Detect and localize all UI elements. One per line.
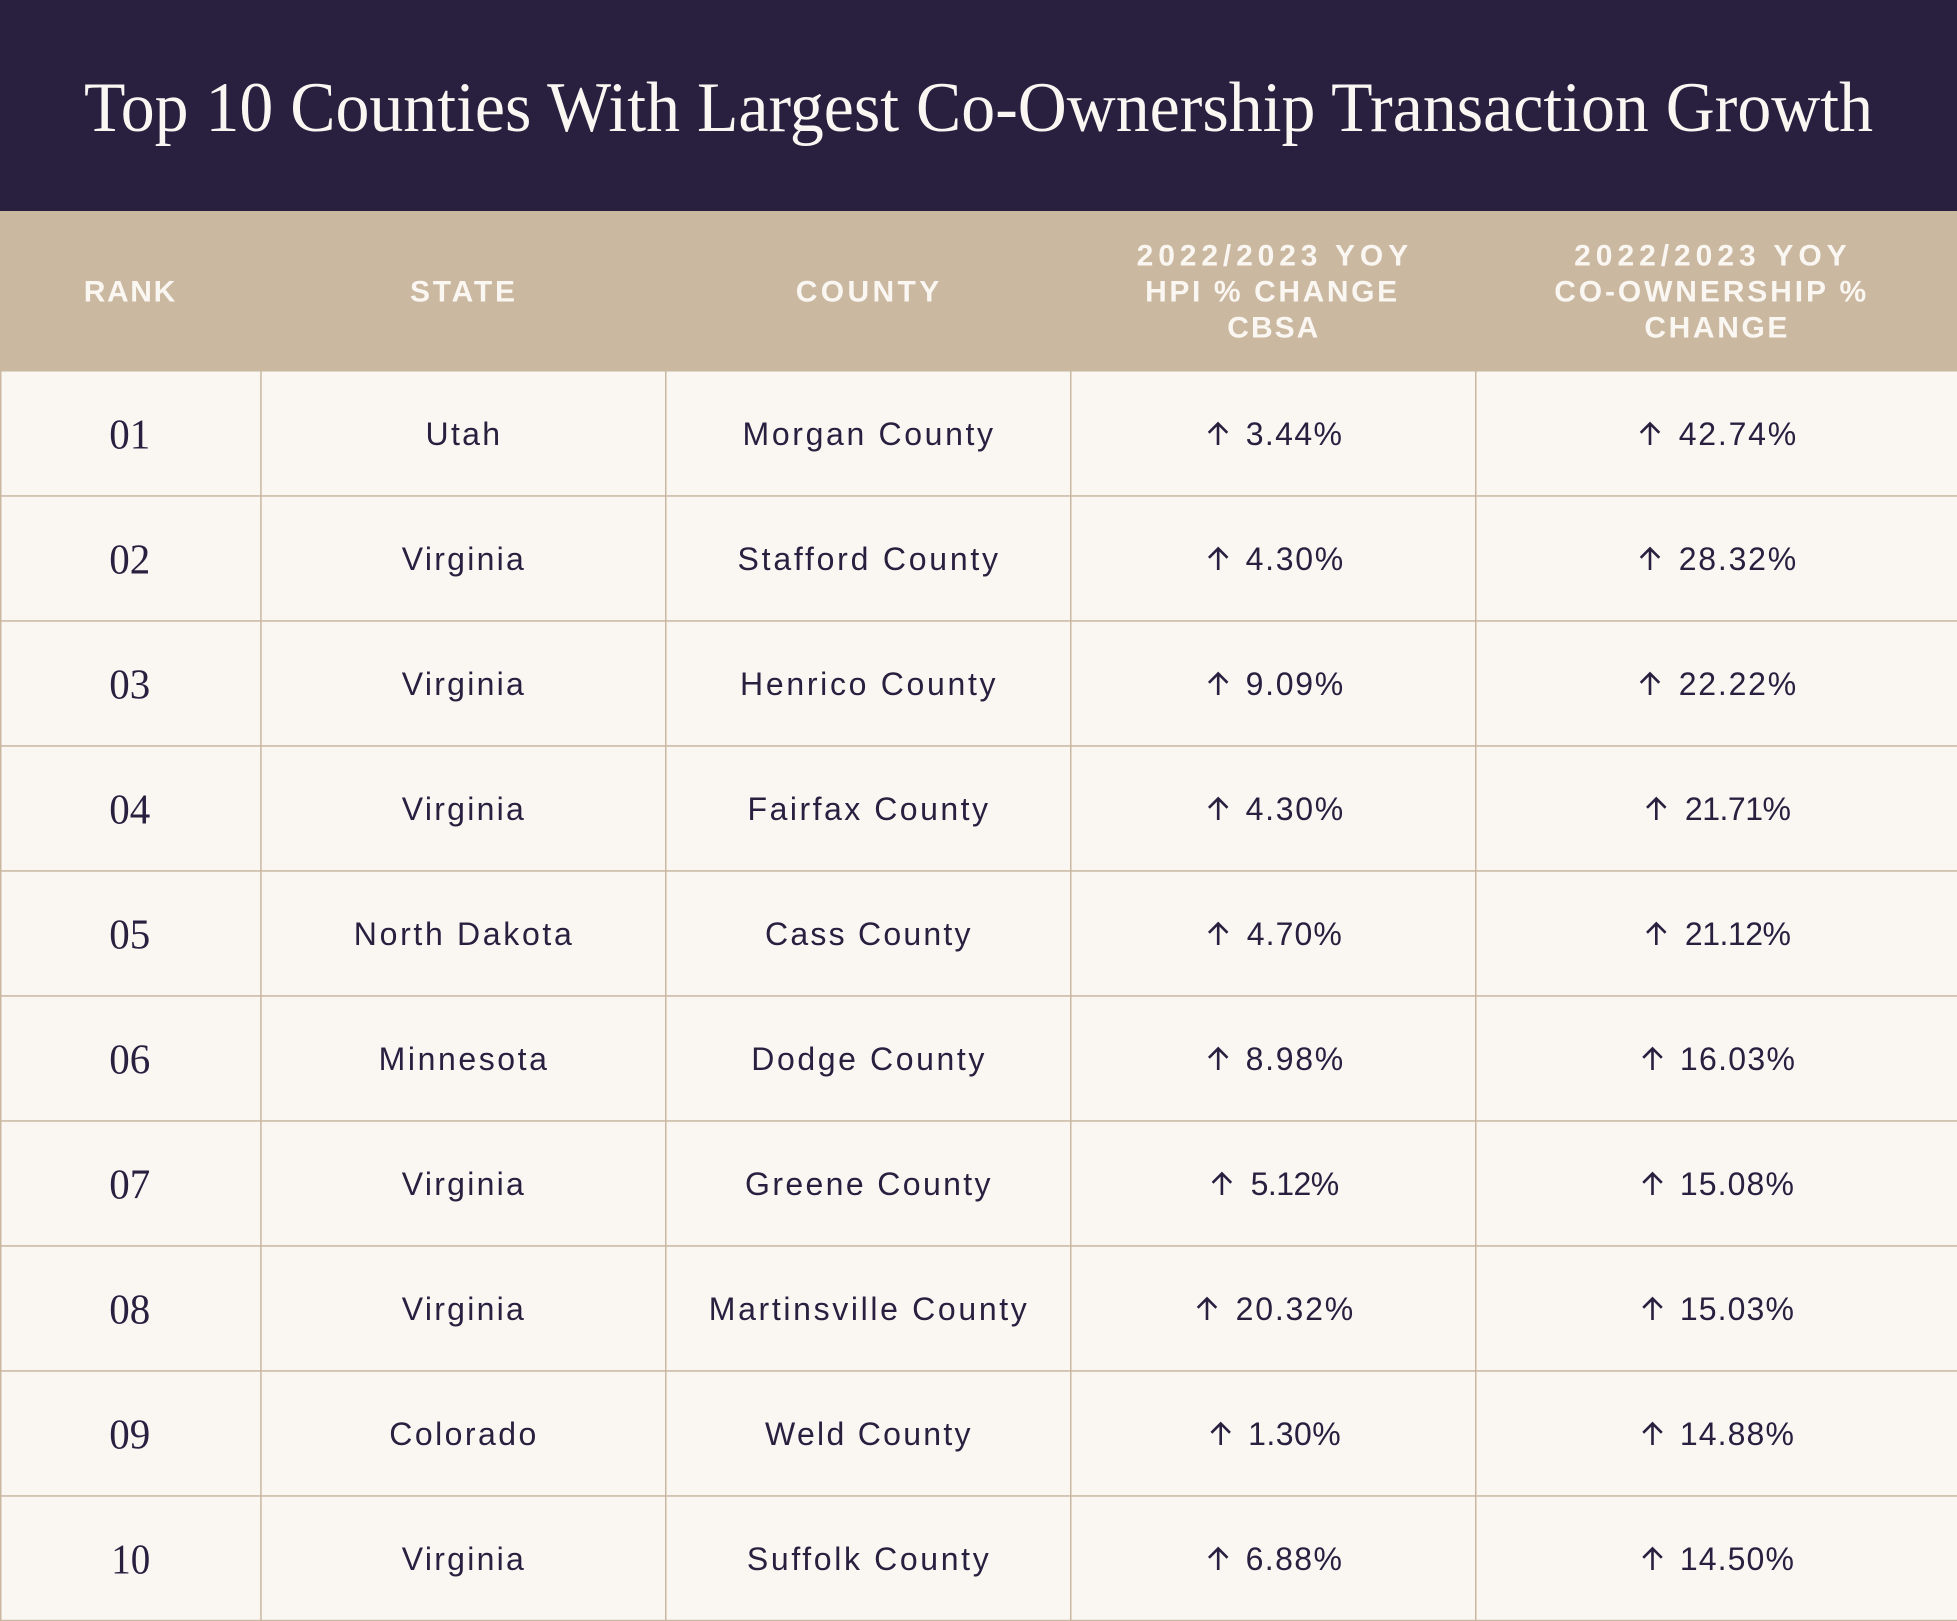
co-ownership change: 16.03% (1680, 1041, 1795, 1077)
HPI change: 4.30% (1246, 541, 1343, 577)
row 06: Minnesota, Dodge County (109, 1037, 1795, 1083)
header: rank: RANK (84, 276, 176, 308)
header: county: COUNTY (796, 276, 939, 308)
co-ownership change: 14.88% (1680, 1416, 1794, 1452)
row 02: Virginia, Stafford County (109, 537, 1796, 583)
co-ownership change: 21.12% (1685, 916, 1791, 952)
rank 04: 04 (109, 787, 150, 833)
HPI change: 20.32% (1236, 1291, 1353, 1327)
rank 03: 03 (109, 662, 150, 708)
row 08: Virginia, Martinsville County (109, 1287, 1794, 1333)
state: Virginia (402, 1541, 524, 1577)
co-ownership change: 42.74% (1679, 416, 1796, 452)
row 01: Utah, Morgan County (109, 412, 1796, 458)
state: Virginia (402, 1291, 524, 1327)
co-ownership change: 22.22% (1679, 666, 1796, 702)
row 04: Virginia, Fairfax County (109, 787, 1791, 833)
state: Virginia (402, 1166, 524, 1202)
state: Minnesota (379, 1041, 547, 1077)
title banner (0, 0, 1957, 211)
rank 08: 08 (109, 1287, 150, 1333)
co-ownership change: 15.03% (1680, 1291, 1794, 1327)
co-ownership change: 28.32% (1679, 541, 1796, 577)
row 05: North Dakota, Cass County (109, 912, 1791, 958)
state: North Dakota (354, 916, 572, 952)
header: co-ownership change: CO-OWNERSHIP % (1554, 276, 1866, 308)
county: Morgan County (743, 416, 993, 452)
rank 02: 02 (109, 537, 150, 583)
row 09: Colorado, Weld County (109, 1412, 1794, 1458)
row 10: Virginia, Suffolk County (111, 1537, 1794, 1583)
header: co-ownership change: 2022/2023 YOY (1574, 240, 1847, 272)
state: Utah (426, 416, 500, 452)
county: Fairfax County (748, 791, 988, 827)
header: co-ownership change: CHANGE (1644, 311, 1787, 344)
state: Virginia (402, 666, 524, 702)
row 03: Virginia, Henrico County (109, 662, 1796, 708)
rank 06: 06 (109, 1037, 150, 1083)
county: Dodge County (751, 1041, 984, 1077)
HPI change: 5.12% (1251, 1166, 1339, 1202)
row 07: Virginia, Greene County (109, 1162, 1794, 1208)
HPI change: 8.98% (1246, 1041, 1343, 1077)
title: Top 10 Counties With Largest Co-Ownership Transaction Growth (84, 69, 1873, 147)
rank 01: 01 (109, 412, 150, 458)
HPI change: 4.30% (1246, 791, 1343, 827)
county: Cass County (765, 916, 971, 952)
table header row (0, 211, 1957, 372)
HPI change: 3.44% (1246, 416, 1342, 452)
HPI change: 6.88% (1246, 1541, 1342, 1577)
header: HPI change (1137, 240, 1408, 344)
HPI change: 1.30% (1248, 1416, 1341, 1452)
header: HPI change: HPI % CHANGE (1145, 276, 1397, 308)
county: Henrico County (740, 666, 996, 702)
county: Stafford County (738, 541, 998, 577)
HPI change (1213, 1166, 1339, 1202)
header: state: STATE (410, 276, 515, 308)
state: Virginia (402, 791, 524, 827)
co-ownership change: 15.08% (1680, 1166, 1794, 1202)
county: Suffolk County (747, 1541, 989, 1577)
header: HPI change: CBSA (1227, 311, 1318, 344)
rank 07: 07 (109, 1162, 150, 1208)
county: Weld County (765, 1416, 971, 1452)
co-ownership change: 14.50% (1680, 1541, 1794, 1577)
county: Martinsville County (709, 1291, 1027, 1327)
HPI change: 9.09% (1246, 666, 1343, 702)
HPI change: 4.70% (1247, 916, 1342, 952)
state: Colorado (389, 1416, 536, 1452)
rank 05: 05 (109, 912, 150, 958)
county: Greene County (745, 1166, 991, 1202)
header: HPI change: 2022/2023 YOY (1137, 240, 1408, 272)
rank 10: 10 (111, 1537, 150, 1583)
rank 09: 09 (109, 1412, 150, 1458)
state: Virginia (402, 541, 524, 577)
header: co-ownership change (1554, 240, 1866, 344)
co-ownership change: 21.71% (1685, 791, 1791, 827)
